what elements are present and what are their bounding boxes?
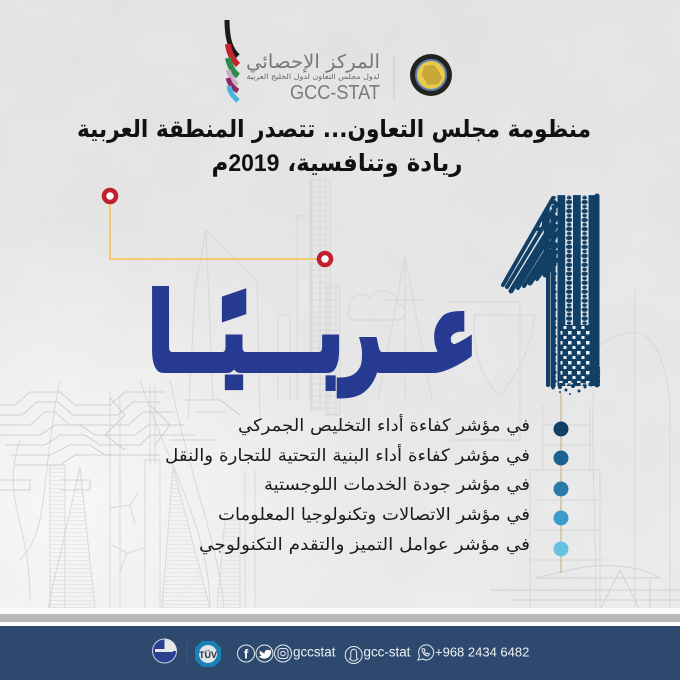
icon: twitter	[256, 645, 273, 662]
list dots	[554, 422, 568, 556]
footer badge 1	[152, 639, 176, 663]
item 4: في مؤشر الاتصالات وتكنولوجيا المعلومات	[218, 505, 530, 525]
logo divider	[393, 55, 395, 99]
numeral 1	[500, 194, 600, 395]
logo: arabic name: المركز الإحصائي	[246, 51, 380, 73]
icon: snapchat	[345, 646, 362, 664]
sails	[48, 465, 240, 608]
headline	[77, 115, 591, 177]
footer badge 2: TUV	[195, 641, 221, 667]
callout connector	[104, 190, 331, 265]
icon: facebook: f	[244, 646, 249, 662]
social handle: gccstat: gccstat	[293, 644, 336, 660]
icon: GCC emblem	[410, 54, 452, 96]
item 3: في مؤشر جودة الخدمات اللوجستية	[264, 475, 530, 495]
headline: ريادة وتنافسية، 2019م	[212, 149, 462, 177]
center connector line	[560, 393, 562, 573]
big word: arabi: عــربـــيًــا	[149, 272, 476, 394]
numeral 1: 1	[449, 132, 675, 460]
footer badge 2: TUV: TÜV	[199, 650, 217, 660]
phone: +968 2434 6482	[435, 644, 529, 660]
item 2: في مؤشر كفاءة أداء البنية التحتية للتجارة والنقل	[165, 444, 530, 466]
logo: rainbow ribbon	[227, 20, 238, 101]
logo: GCC-STAT: GCC-STAT	[290, 82, 380, 104]
list of indices	[165, 414, 568, 556]
icon: whatsapp	[418, 645, 434, 660]
item 5: في مؤشر عوامل التميز والتقدم التكنولوجي	[199, 535, 530, 555]
logo: arabic subtitle: لدول مجلس التعاون لدول الخليج العربية	[246, 72, 380, 81]
icon: instagram	[274, 645, 292, 662]
footer stripes	[0, 608, 680, 626]
footer bar	[0, 626, 680, 680]
social handle: gcc-stat: gcc-stat	[364, 644, 411, 660]
item 1: في مؤشر كفاءة أداء التخليص الجمركي	[238, 414, 530, 436]
icon: facebook	[238, 645, 254, 662]
circuit board lines	[0, 392, 240, 490]
ship line art	[490, 566, 680, 610]
social icons	[238, 645, 434, 664]
headline: منظومة مجلس التعاون... تتصدر المنطقة العربية	[77, 115, 591, 143]
skyline line art	[13, 170, 670, 615]
